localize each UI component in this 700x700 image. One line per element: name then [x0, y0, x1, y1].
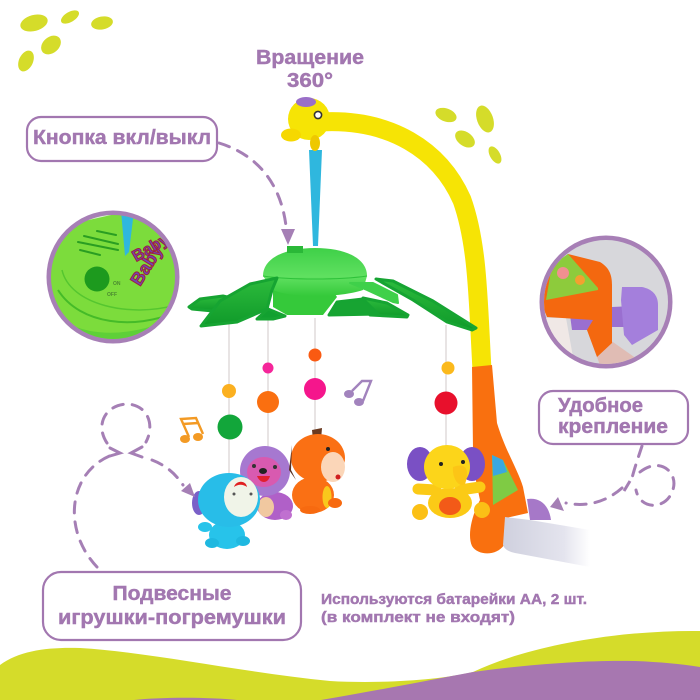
heading: rotation 360	[256, 47, 364, 92]
sub: on-off label	[107, 281, 120, 296]
orange pole	[470, 365, 528, 553]
callout: easy mount: крепление	[558, 416, 668, 438]
note: batteries: (в комплект не входят)	[321, 609, 515, 626]
arrow: power button to dome	[219, 143, 295, 245]
sub: on-off label: OFF	[107, 292, 117, 298]
strings	[229, 310, 446, 480]
sub: back right leaves	[363, 298, 408, 317]
sub: pole sticker	[492, 455, 518, 505]
sub: sticker	[546, 254, 598, 300]
toy: orange lion	[289, 428, 345, 514]
dolphin head	[281, 97, 330, 151]
sub: big right leaf	[376, 279, 476, 330]
bottom wave background	[0, 631, 700, 700]
blue ribbon	[309, 150, 322, 246]
toy: purple bear	[240, 446, 293, 520]
note: purple	[344, 381, 371, 406]
sub: on-off button	[84, 266, 110, 292]
callout: power button: Кнопка вкл/выкл	[33, 127, 211, 149]
note: batteries	[321, 591, 587, 626]
heading: rotation 360: 360°	[287, 70, 333, 92]
note: orange	[180, 418, 203, 443]
mobile arm	[320, 122, 482, 370]
sub: on-off label: ON	[113, 281, 121, 287]
callout: hanging toys: игрушки-погремушки	[58, 607, 286, 629]
sub: threaded bolt	[570, 306, 624, 330]
arrow: hanging toys loop	[74, 404, 195, 567]
toy: yellow elephant	[407, 445, 490, 520]
callout: easy mount	[539, 391, 688, 444]
sub: dome	[263, 248, 367, 296]
sub: big left leaf	[201, 278, 277, 326]
callout: easy mount: Удобное	[558, 395, 643, 417]
sub: purple knob	[621, 287, 658, 345]
sub: purple logo: Baby	[130, 231, 172, 265]
green canopy	[189, 246, 476, 330]
inset: clamp closeup	[540, 236, 672, 368]
sub: orange clamp	[540, 254, 612, 357]
sub: front right light leaf	[350, 283, 398, 303]
arrow: easy mount loop	[550, 446, 674, 511]
callout: power button	[27, 117, 217, 161]
heading: rotation 360: Вращение	[256, 47, 364, 69]
beads	[218, 348, 458, 440]
toy: blue monkey	[192, 473, 260, 549]
note: batteries: Используются батарейки АА, 2 шт.	[321, 591, 587, 608]
callout: hanging toys: Подвесные	[112, 583, 232, 605]
callout: hanging toys	[43, 572, 301, 640]
sub: hanging ribbon	[121, 216, 134, 256]
sub: lower bowl	[273, 286, 337, 315]
inset: power button closeup	[46, 210, 180, 345]
sub: purple logo: Baby	[126, 241, 167, 289]
decorative leaves top left	[15, 8, 114, 74]
clamp bar and purple knob	[503, 499, 590, 567]
sub: back left leaf	[189, 296, 240, 311]
decorative leaves right of arm	[433, 103, 504, 166]
